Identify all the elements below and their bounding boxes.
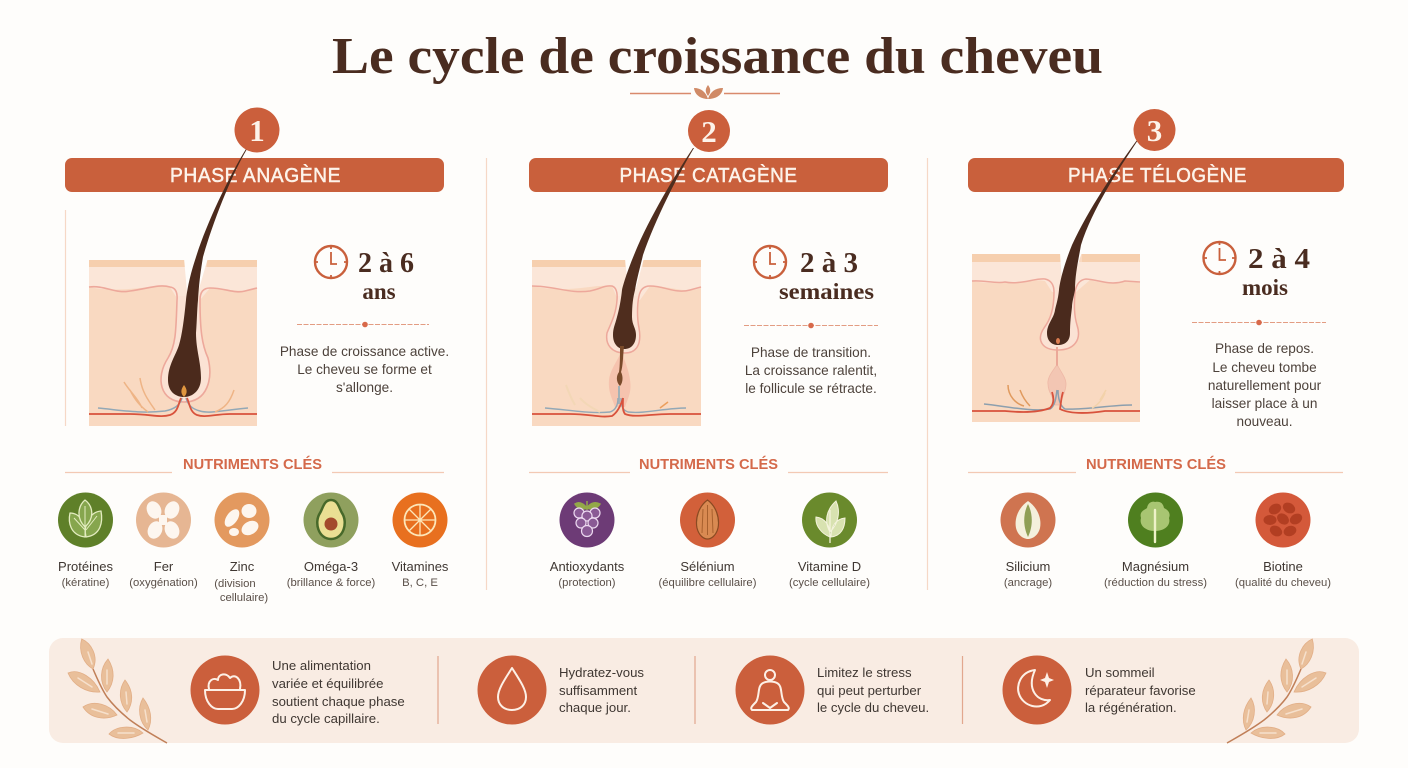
- nutrient: oméga-3: (brillance & force): [287, 577, 375, 589]
- nutrient: vitamine D: Vitamine D: [798, 559, 861, 574]
- tip: hydratation: Hydratez-vous: [559, 665, 644, 680]
- number badge 1: [234, 108, 280, 152]
- tip: alimentation: variée et équilibrée: [272, 676, 383, 691]
- description: laisser place à un: [1212, 396, 1317, 411]
- description: Le cheveu tombe: [1212, 360, 1317, 375]
- tip: alimentation: Une alimentation: [272, 658, 371, 673]
- duration: 2 à 6 ans: ans: [362, 279, 396, 304]
- number badge 3: 3: [1147, 113, 1162, 148]
- description: Phase de repos.: [1215, 341, 1314, 356]
- nutrient: silicium: Silicium: [1006, 559, 1050, 574]
- tip: stress: [736, 656, 929, 724]
- description: naturellement pour: [1208, 378, 1322, 393]
- icon: left leaf branch: [68, 639, 167, 743]
- nutrient: protéines: [58, 492, 113, 589]
- nutrient: sélénium: [659, 492, 757, 589]
- description: La croissance ralentit,: [745, 363, 877, 378]
- nutrient: magnésium: (réduction du stress): [1104, 577, 1207, 589]
- tip: stress: qui peut perturber: [817, 683, 922, 698]
- banner: phase catagène: PHASE CATAGÈNE: [620, 164, 798, 187]
- nutrient: fer: Fer: [154, 559, 174, 574]
- nutrient: vitamines: B, C, E: [402, 577, 438, 589]
- nutrient: zinc: [214, 492, 270, 604]
- skin cross-section with growing hair: [89, 149, 257, 426]
- tip: sommeil: réparateur favorise: [1085, 683, 1196, 698]
- panel: conseils: [49, 638, 1359, 743]
- duration: 2 à 4 mois: 2 à 4: [1248, 244, 1310, 275]
- nutrient: antioxydants: (protection): [558, 577, 616, 589]
- description: Phase de croissance active.: [280, 344, 449, 359]
- number badge 1: 1: [249, 113, 265, 148]
- nutrient: vitamines: [392, 492, 449, 589]
- nutrient: antioxydants: Antioxydants: [550, 559, 625, 574]
- nutrient: zinc: Zinc: [230, 559, 255, 574]
- nutrient: fer: (oxygénation): [129, 577, 198, 589]
- duration: 2 à 3 semaines: [754, 246, 874, 304]
- nutrient: oméga-3: Oméga-3: [304, 559, 358, 574]
- tip: alimentation: du cycle capillaire.: [272, 711, 380, 726]
- description: le follicule se rétracte.: [745, 381, 877, 396]
- nutrient: vitamines: Vitamines: [392, 559, 449, 574]
- description: [280, 344, 449, 395]
- duration: 2 à 3 semaines: 2 à 3: [800, 248, 858, 279]
- number badge 3: [1134, 109, 1176, 151]
- nutrient: biotine: [1235, 492, 1331, 589]
- tip: alimentation: soutient chaque phase: [272, 694, 405, 709]
- panel: phase anagène: [58, 108, 449, 604]
- nutrient: zinc: (division: [214, 578, 256, 590]
- duration: 2 à 4 mois: [1204, 242, 1310, 300]
- heading: nutriments clés: NUTRIMENTS CLÉS: [1086, 456, 1226, 473]
- nutrient: sélénium: Sélénium: [680, 559, 735, 574]
- banner: phase télogène: [968, 158, 1344, 192]
- nutrient: antioxydants: [550, 492, 625, 589]
- description: [745, 345, 877, 396]
- tip: hydratation: suffisamment: [559, 683, 638, 698]
- nutrient: protéines: Protéines: [58, 559, 113, 574]
- nutrient: magnésium: Magnésium: [1122, 559, 1189, 574]
- description: nouveau.: [1237, 414, 1292, 429]
- panel: phase télogène: [968, 109, 1344, 589]
- nutrient: sélénium: (équilibre cellulaire): [659, 577, 757, 589]
- banner: phase catagène: [529, 158, 888, 192]
- title: Le cycle de croissance du cheveu: [332, 28, 1103, 85]
- description: Le cheveu se forme et: [297, 362, 432, 377]
- duration: 2 à 3 semaines: semaines: [779, 279, 874, 304]
- tip: sommeil: Un sommeil: [1085, 665, 1155, 680]
- description: s'allonge.: [336, 380, 393, 395]
- icon: right leaf branch: [1227, 639, 1326, 743]
- tip: hydratation: chaque jour.: [559, 700, 631, 715]
- nutrient: silicium: (ancrage): [1004, 577, 1052, 589]
- nutrient: vitamine D: [789, 492, 870, 589]
- nutrient: vitamine D: (cycle cellulaire): [789, 577, 870, 589]
- banner: phase anagène: PHASE ANAGÈNE: [170, 164, 341, 187]
- duration: 2 à 6 ans: 2 à 6: [358, 248, 414, 279]
- nutrient: biotine: Biotine: [1263, 559, 1303, 574]
- nutrient: silicium: [1000, 492, 1056, 589]
- tip: hydratation: [478, 656, 644, 724]
- number badge 2: [688, 110, 730, 152]
- tip: alimentation: [190, 656, 405, 726]
- nutrient: protéines: (kératine): [62, 577, 110, 589]
- nutrient: magnésium: [1104, 492, 1207, 589]
- nutrient: biotine: (qualité du cheveu): [1235, 577, 1331, 589]
- tip: sommeil: la régénération.: [1085, 700, 1177, 715]
- banner: phase télogène: PHASE TÉLOGÈNE: [1068, 164, 1247, 187]
- description: Phase de transition.: [751, 345, 871, 360]
- tip: stress: le cycle du cheveu.: [817, 700, 929, 715]
- skin cross-section with resting hair: [972, 140, 1140, 422]
- duration: 2 à 6 ans: [315, 246, 414, 304]
- skin cross-section with retracting follicle: [532, 148, 701, 426]
- banner: phase anagène: [65, 158, 444, 192]
- tip: sommeil: [1002, 656, 1196, 724]
- heading: nutriments clés: NUTRIMENTS CLÉS: [639, 456, 778, 473]
- nutrient: fer: [129, 492, 198, 589]
- panel: phase catagène: [529, 110, 888, 589]
- number badge 2: 2: [701, 114, 717, 149]
- tip: stress: Limitez le stress: [817, 665, 912, 680]
- description: [1208, 341, 1322, 429]
- heading: nutriments clés: NUTRIMENTS CLÉS: [183, 456, 322, 473]
- duration: 2 à 4 mois: mois: [1242, 275, 1288, 300]
- nutrient: oméga-3: [287, 492, 375, 589]
- nutrient: zinc: cellulaire): [220, 592, 268, 604]
